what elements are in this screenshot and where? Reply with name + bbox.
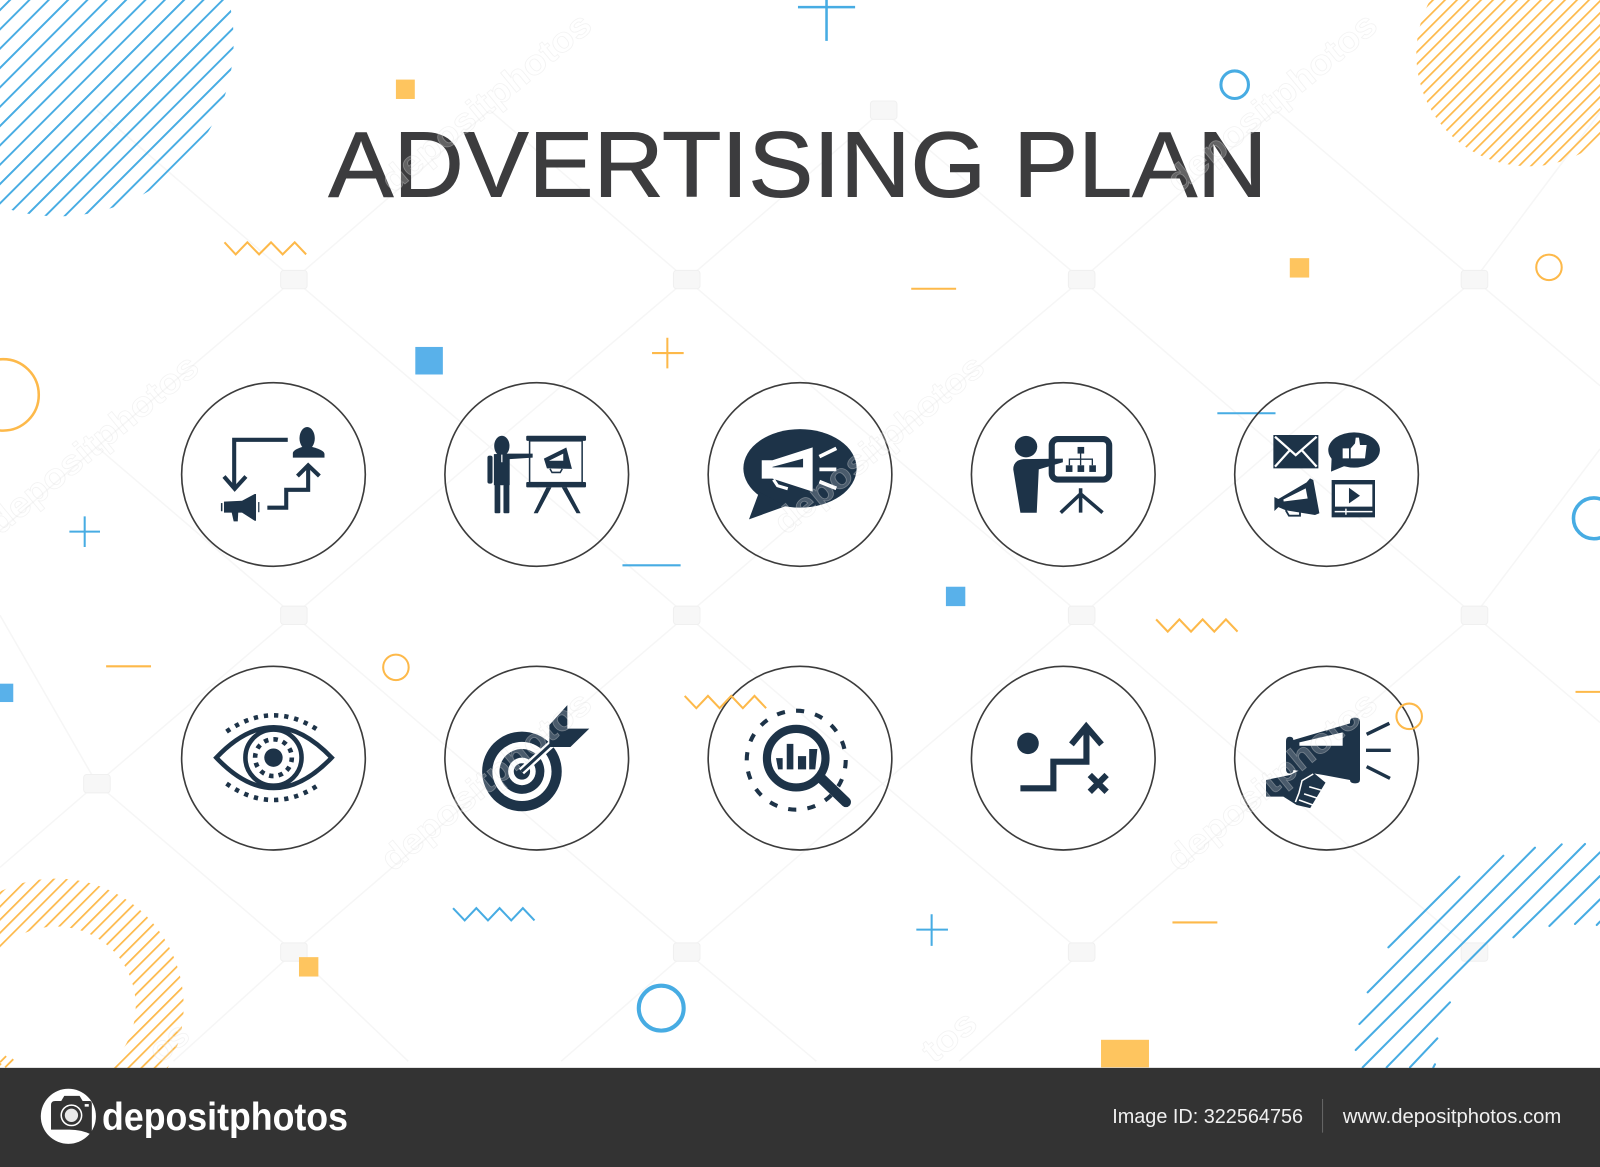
panel: stairs and arrow [971, 666, 1155, 850]
watermarks: os [141, 1015, 197, 1070]
icon: thumbs up bubble [1328, 432, 1380, 472]
title: ADVERTISING PLAN [329, 112, 1267, 216]
watermarks: depositphotos [1160, 6, 1385, 200]
watermarks [0, 6, 1385, 1070]
icon: megaphone [1274, 478, 1319, 516]
divider [1322, 1099, 1323, 1133]
watermarks: depositphotos [374, 684, 599, 879]
icon: camera logo [41, 1089, 96, 1144]
icon panels, row 2 [182, 666, 1418, 850]
image id: Image ID: 322564756 [1112, 1106, 1303, 1128]
panel: megaphone in speech bubble [708, 383, 892, 566]
watermarks: depositphotos [1160, 684, 1385, 879]
logo wordmark: depositphotos [102, 1096, 348, 1139]
blue striped circle, top left [0, 0, 234, 216]
footer bar [0, 1068, 1600, 1167]
panel: presenter with org chart [971, 383, 1155, 566]
orange ring and zigzag overlapping panels [685, 696, 1422, 729]
website url: www.depositphotos.com [1342, 1106, 1561, 1128]
panel: target with arrow [445, 666, 629, 850]
orange striped ring, bottom left [0, 879, 184, 1134]
icon panels, row 1 [182, 383, 1418, 566]
panel: eye [182, 666, 365, 850]
panel: hand holding megaphone [1235, 666, 1418, 850]
watermarks: tos [915, 1004, 984, 1070]
watermarks: depositphotos [767, 347, 992, 542]
panel: media channels grid [1235, 383, 1418, 566]
watermarks: depositphotos [374, 6, 599, 200]
icon: envelope [1273, 435, 1318, 468]
panel: audience funnel with megaphone [182, 383, 365, 566]
panel: magnifier with bar chart [708, 666, 892, 850]
icon: video player [1332, 480, 1375, 517]
icon: fist [1266, 770, 1326, 808]
blue striped partial ring, bottom right [1356, 844, 1600, 1067]
icon: sound rays [1366, 723, 1391, 778]
panel: presenter with megaphone board [445, 383, 629, 566]
icon: megaphone body [1286, 718, 1360, 783]
orange striped circle, top right [1416, 0, 1600, 166]
